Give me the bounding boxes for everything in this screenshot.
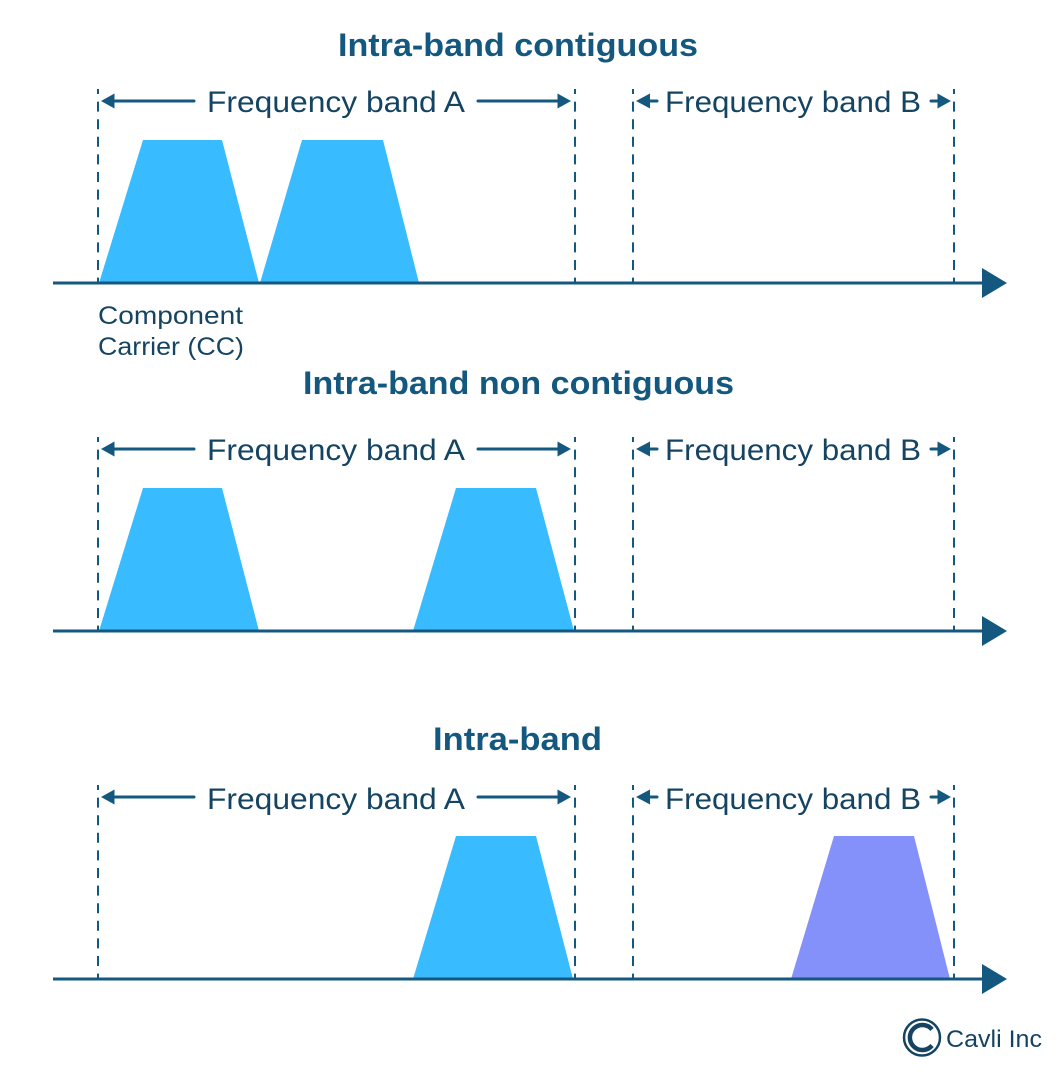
copyright notice: [904, 1020, 1042, 1056]
title: intra-band: Intra-band: [433, 721, 602, 757]
title: intra-band non contiguous: Intra-band non contiguous: [303, 365, 734, 401]
label: component carrier: Component: [98, 302, 243, 330]
arrow: band A right: [478, 442, 571, 456]
panel: intra-band contiguous: [53, 27, 1007, 361]
frequency axis arrow: [53, 268, 1007, 298]
label: component carrier: Carrier (CC): [98, 333, 244, 361]
arrow: band B right: [931, 442, 951, 456]
label: frequency band A: Frequency band A: [207, 783, 465, 816]
carrier: first component carrier: [99, 488, 259, 631]
carrier: second component carrier: [413, 488, 574, 631]
arrow: band B right: [931, 94, 951, 108]
carrier: second component carrier: [260, 140, 419, 283]
icon: copyright symbol: [904, 1020, 940, 1056]
label: frequency band B: Frequency band B: [665, 86, 921, 119]
frequency axis arrow: [53, 616, 1007, 646]
arrow: band A right: [478, 790, 571, 804]
arrow: band A left: [101, 94, 194, 108]
arrow: band A right: [478, 94, 571, 108]
arrow: band A left: [101, 442, 194, 456]
frequency axis arrow: [53, 964, 1007, 994]
band boundaries: [98, 89, 954, 283]
carrier: band B component carrier: [791, 836, 950, 979]
label: frequency band A: Frequency band A: [207, 86, 465, 119]
panel: intra-band non contiguous: [53, 365, 1007, 646]
arrow: band B left: [636, 442, 657, 456]
arrow: band A left: [101, 790, 194, 804]
panel: intra-band: [53, 721, 1007, 994]
label: frequency band B: Frequency band B: [665, 783, 921, 816]
band boundaries: [98, 437, 954, 631]
label: frequency band A: Frequency band A: [207, 434, 465, 467]
arrow: band B left: [636, 94, 657, 108]
title: intra-band contiguous: Intra-band contiguous: [338, 27, 698, 63]
band boundaries: [98, 785, 954, 979]
carrier: band A component carrier: [413, 836, 573, 979]
text: Cavli Inc: Cavli Inc: [946, 1026, 1042, 1053]
arrow: band B left: [636, 790, 657, 804]
carrier: first component carrier: [99, 140, 259, 283]
arrow: band B right: [931, 790, 951, 804]
label: frequency band B: Frequency band B: [665, 434, 921, 467]
